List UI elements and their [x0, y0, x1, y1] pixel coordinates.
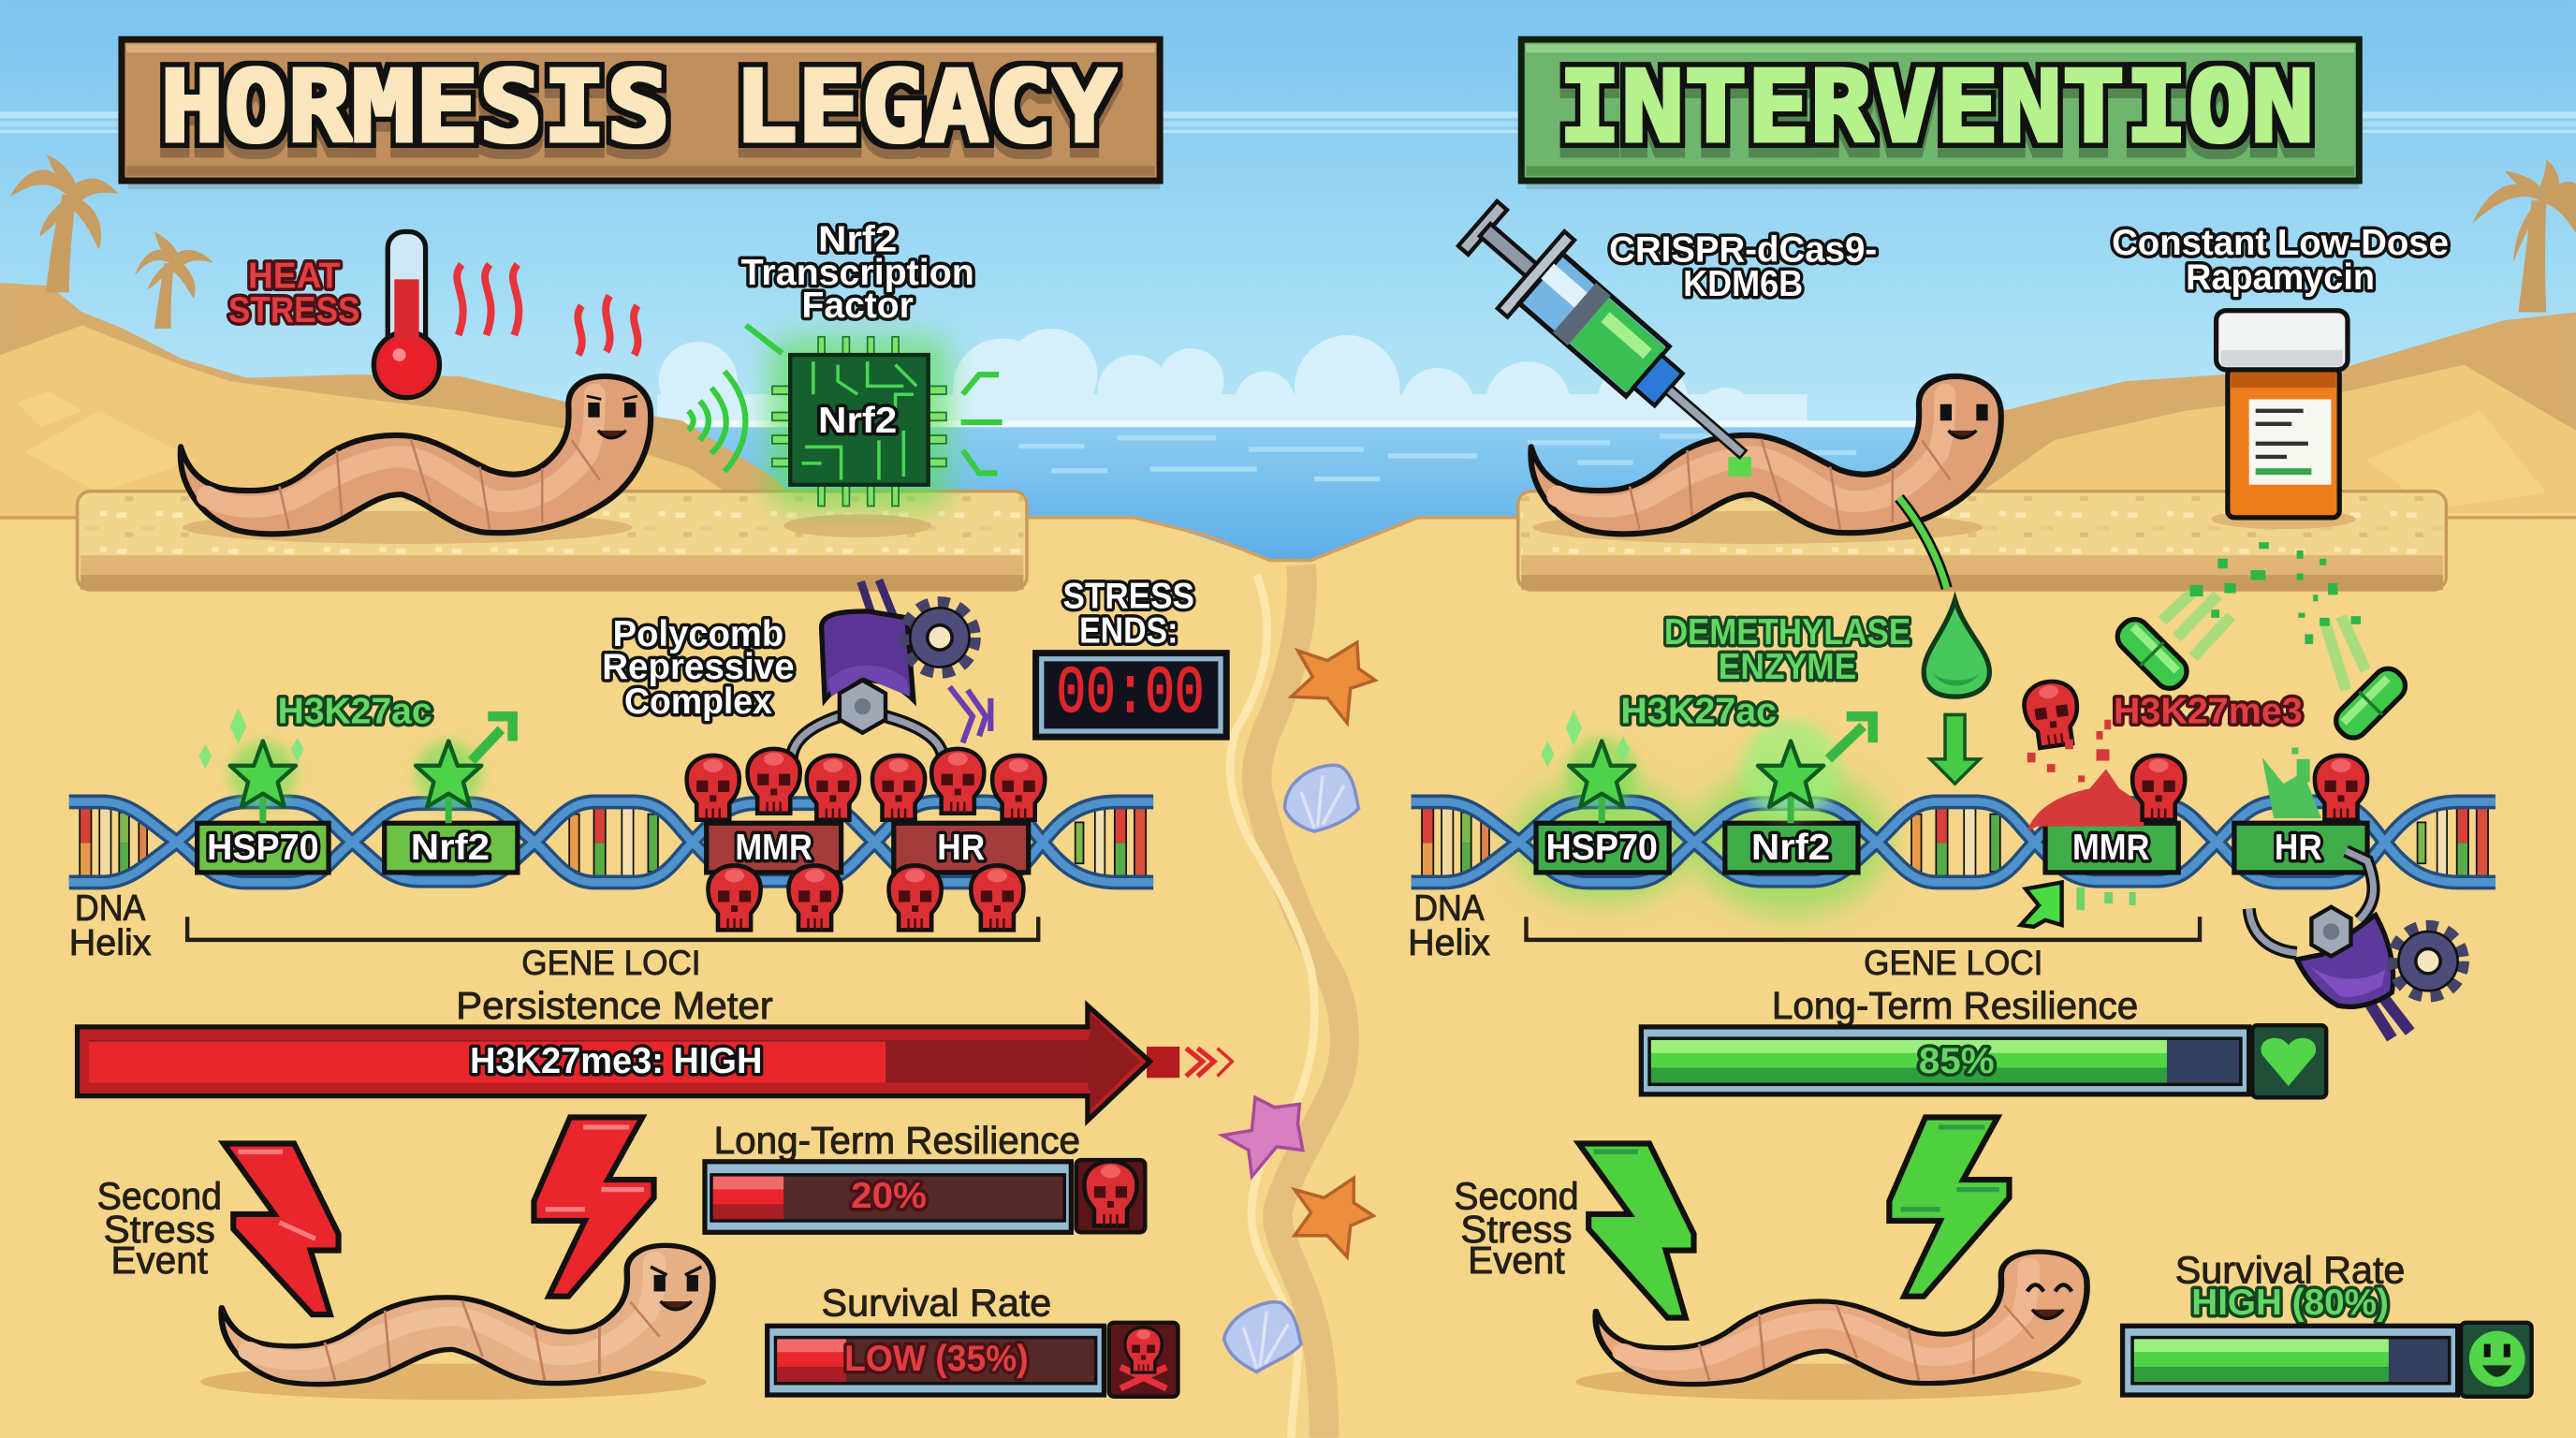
gene loci label left: GENE LOCI — [521, 944, 701, 982]
motion marks purple — [949, 687, 990, 742]
DNA helix label left — [69, 888, 152, 963]
second stress event label right: Second — [1454, 1175, 1579, 1218]
label: H3K27ac right: H3K27ac — [1620, 691, 1777, 731]
timer — [1035, 653, 1227, 738]
icon: thermometer — [373, 231, 440, 398]
arrow: up right green right side — [1828, 716, 1873, 759]
title text: HORMESIS LEGACY — [160, 50, 1117, 165]
label: H3K27ac left: H3K27ac — [278, 691, 432, 731]
icon: Nrf2 chip — [768, 337, 949, 537]
title banner: Hormesis Legacy — [122, 39, 1160, 189]
icon: pill bottle — [2211, 311, 2356, 529]
second stress event label right — [1454, 1175, 1579, 1282]
label: Nrf2 transcription factor: Transcription — [741, 253, 974, 293]
gene boxes right: HSP70 — [1546, 828, 1658, 868]
worm: heat stressed — [181, 376, 651, 544]
arrow: down to DNA — [1930, 714, 1980, 784]
green tube from worm — [1899, 498, 1947, 588]
starfish orange bottom — [1295, 1178, 1373, 1257]
green tube inner — [1899, 498, 1947, 588]
label: Nrf2 transcription factor: Factor — [802, 286, 914, 326]
label: CRISPR-dCas9-KDM6B: CRISPR-dCas9- — [1609, 229, 1877, 270]
label: demethylase enzyme: ENZYME — [1719, 647, 1856, 687]
stress ends label: STRESS — [1063, 577, 1194, 617]
icon: smiley badge — [2461, 1323, 2532, 1397]
right glow — [1512, 768, 1889, 916]
label: CRISPR-dCas9-KDM6B: KDM6B — [1683, 264, 1803, 304]
gene boxes left: HSP70 — [207, 828, 319, 868]
skulls on repressed genes left — [687, 749, 1045, 930]
label: heat stress — [228, 256, 359, 330]
second stress event label left: Stress — [104, 1208, 215, 1251]
label: H3K27me3: H3K27me3 — [2114, 691, 2303, 731]
survival bar low — [768, 1326, 1104, 1395]
palm tree right — [2472, 159, 2576, 312]
survival rate labels right — [2175, 1249, 2405, 1323]
icon: skull badge — [1076, 1160, 1145, 1232]
label: constant low-dose rapamycin: Rapamycin — [2186, 257, 2375, 298]
polycomb label: Repressive — [602, 647, 795, 687]
worm: intervention — [1530, 376, 2001, 544]
gene boxes left: HR — [937, 828, 985, 868]
stress ends label: ENDS: — [1079, 610, 1178, 651]
red splatter — [2027, 720, 2144, 831]
survival rate labels right: HIGH (80%) — [2191, 1283, 2389, 1323]
icon: removed polycomb claw — [2249, 851, 2463, 1038]
second stress event label left — [97, 1175, 222, 1282]
label: CRISPR-dCas9-KDM6B — [1609, 229, 1877, 304]
second stress event label right: Stress — [1460, 1208, 1573, 1251]
gene boxes right — [1536, 823, 2367, 873]
green splash near HR — [2262, 748, 2321, 818]
survival rate labels right: Survival Rate — [2175, 1249, 2405, 1292]
second stress event label left: Event — [111, 1239, 208, 1282]
green pill trails — [2162, 542, 2365, 690]
long-term resilience label right: Long-Term Resilience — [1772, 984, 2138, 1027]
gene boxes right: MMR — [2072, 828, 2150, 868]
resilience bar 85 percent — [1641, 1027, 2249, 1094]
survival bar low: LOW (35%) — [844, 1339, 1029, 1379]
icon: Nrf2 chip: Nrf2 — [818, 401, 897, 441]
acetyl stars left — [198, 708, 481, 823]
label: demethylase enzyme: DEMETHYLASE — [1664, 612, 1910, 653]
label: demethylase enzyme — [1664, 612, 1910, 687]
stress ends label — [1063, 577, 1194, 651]
icon: signal waves — [688, 325, 1003, 473]
resilience bar 20 percent — [705, 1162, 1071, 1232]
DNA helix label right: DNA — [1413, 888, 1485, 929]
lightning bolts green — [1579, 1117, 2009, 1318]
DNA helix label left: Helix — [69, 923, 152, 963]
DNA helix label right: Helix — [1408, 923, 1490, 963]
second stress event label right: Event — [1468, 1239, 1565, 1282]
seashell bottom — [1224, 1302, 1301, 1372]
resilience bar 20 percent: 20% — [851, 1176, 927, 1216]
seashell top — [1284, 765, 1358, 831]
gene loci bracket right — [1526, 917, 2200, 940]
icon: skull and crossbones — [1109, 1323, 1178, 1397]
survival rate label left: Survival Rate — [822, 1282, 1051, 1325]
lightning bolts red — [224, 1117, 654, 1314]
gene loci label right: GENE LOCI — [1864, 944, 2042, 982]
second stress event label left: Second — [97, 1175, 222, 1218]
gene boxes left: Nrf2 — [411, 828, 490, 868]
polycomb label — [602, 614, 795, 722]
icon: enzyme drop — [1924, 600, 1989, 697]
pill left — [2112, 613, 2193, 695]
starfish pink — [1222, 1097, 1303, 1177]
persistence meter label: Persistence Meter — [456, 984, 773, 1027]
worm: resilient — [1575, 1252, 2087, 1400]
gene boxes left — [198, 823, 1029, 873]
skulls remaining right — [2132, 756, 2367, 820]
acetyl stars right — [1541, 710, 1840, 823]
sand platform right — [1518, 492, 2446, 590]
survival bar high — [2123, 1326, 2458, 1395]
icon: heat waves — [457, 265, 638, 355]
worm: weakened — [200, 1245, 713, 1400]
persistence meter arrow — [78, 1005, 1232, 1121]
long-term resilience label left: Long-Term Resilience — [714, 1119, 1080, 1162]
gene boxes right: Nrf2 — [1751, 828, 1830, 868]
label: heat stress: HEAT — [248, 256, 341, 296]
palm trees left — [10, 154, 213, 329]
title text: INTERVENTION — [1559, 50, 2314, 165]
label: heat stress: STRESS — [228, 290, 359, 330]
timer: 00:00 — [1057, 658, 1204, 732]
label: constant low-dose rapamycin: Constant Low-Dose — [2112, 223, 2449, 263]
removed skull — [2021, 678, 2083, 749]
resilience bar 85 percent: 85% — [1919, 1041, 1995, 1081]
polycomb label: Polycomb — [613, 614, 783, 654]
persistence meter arrow: H3K27me3: HIGH — [470, 1041, 762, 1081]
right helix — [1412, 801, 2496, 882]
gene boxes left: MMR — [735, 828, 812, 868]
left helix — [69, 801, 1153, 882]
arrow: up right green — [472, 716, 513, 761]
icon: polycomb claw — [792, 580, 974, 775]
DNA helix label right — [1408, 888, 1490, 963]
icon: syringe — [1444, 185, 1777, 492]
label: constant low-dose rapamycin — [2112, 223, 2449, 298]
pill right — [2330, 663, 2411, 744]
gene boxes right: HR — [2275, 828, 2322, 868]
DNA helix label left: DNA — [75, 888, 146, 929]
gene loci bracket left — [187, 917, 1038, 940]
title banner: Intervention — [1521, 39, 2359, 189]
sand platform left — [78, 492, 1027, 590]
arrow: green up right below MMR — [2021, 882, 2136, 927]
icon: heart badge — [2252, 1025, 2326, 1097]
polycomb label: Complex — [624, 682, 772, 722]
label: Nrf2 transcription factor — [741, 220, 974, 326]
starfish orange top — [1292, 642, 1375, 723]
label: Nrf2 transcription factor: Nrf2 — [818, 220, 897, 260]
